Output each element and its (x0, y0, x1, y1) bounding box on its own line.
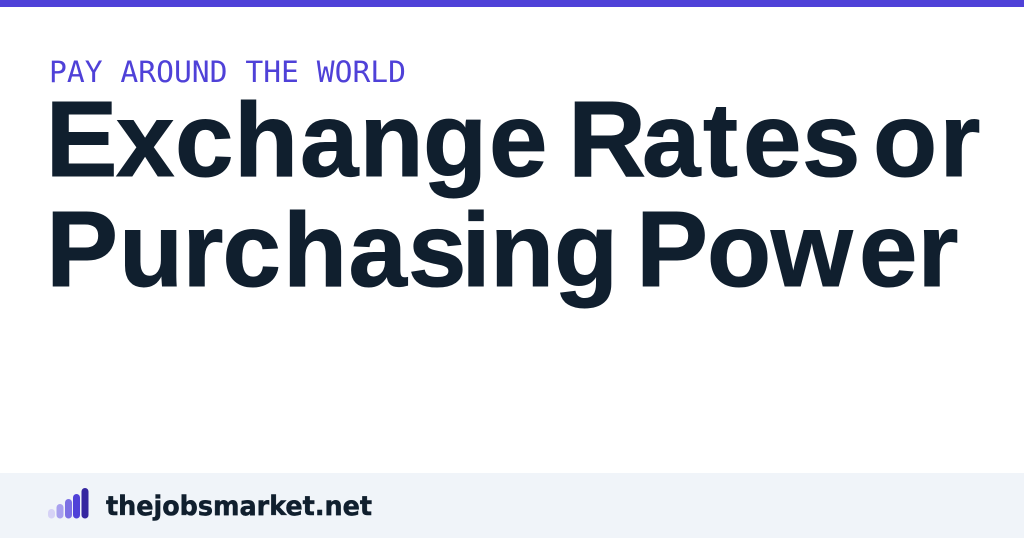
footer band (0, 473, 1024, 538)
top accent bar (0, 0, 1024, 7)
title: Purchasing Power (46, 188, 958, 309)
eyebrow heading: PAY AROUND THE WORLD (49, 55, 406, 89)
title (46, 78, 980, 309)
title: Exchange Rates or (46, 78, 980, 199)
icon: logo signal bars (48, 488, 88, 518)
logo wordmark: thejobsmarket.net (106, 491, 372, 522)
